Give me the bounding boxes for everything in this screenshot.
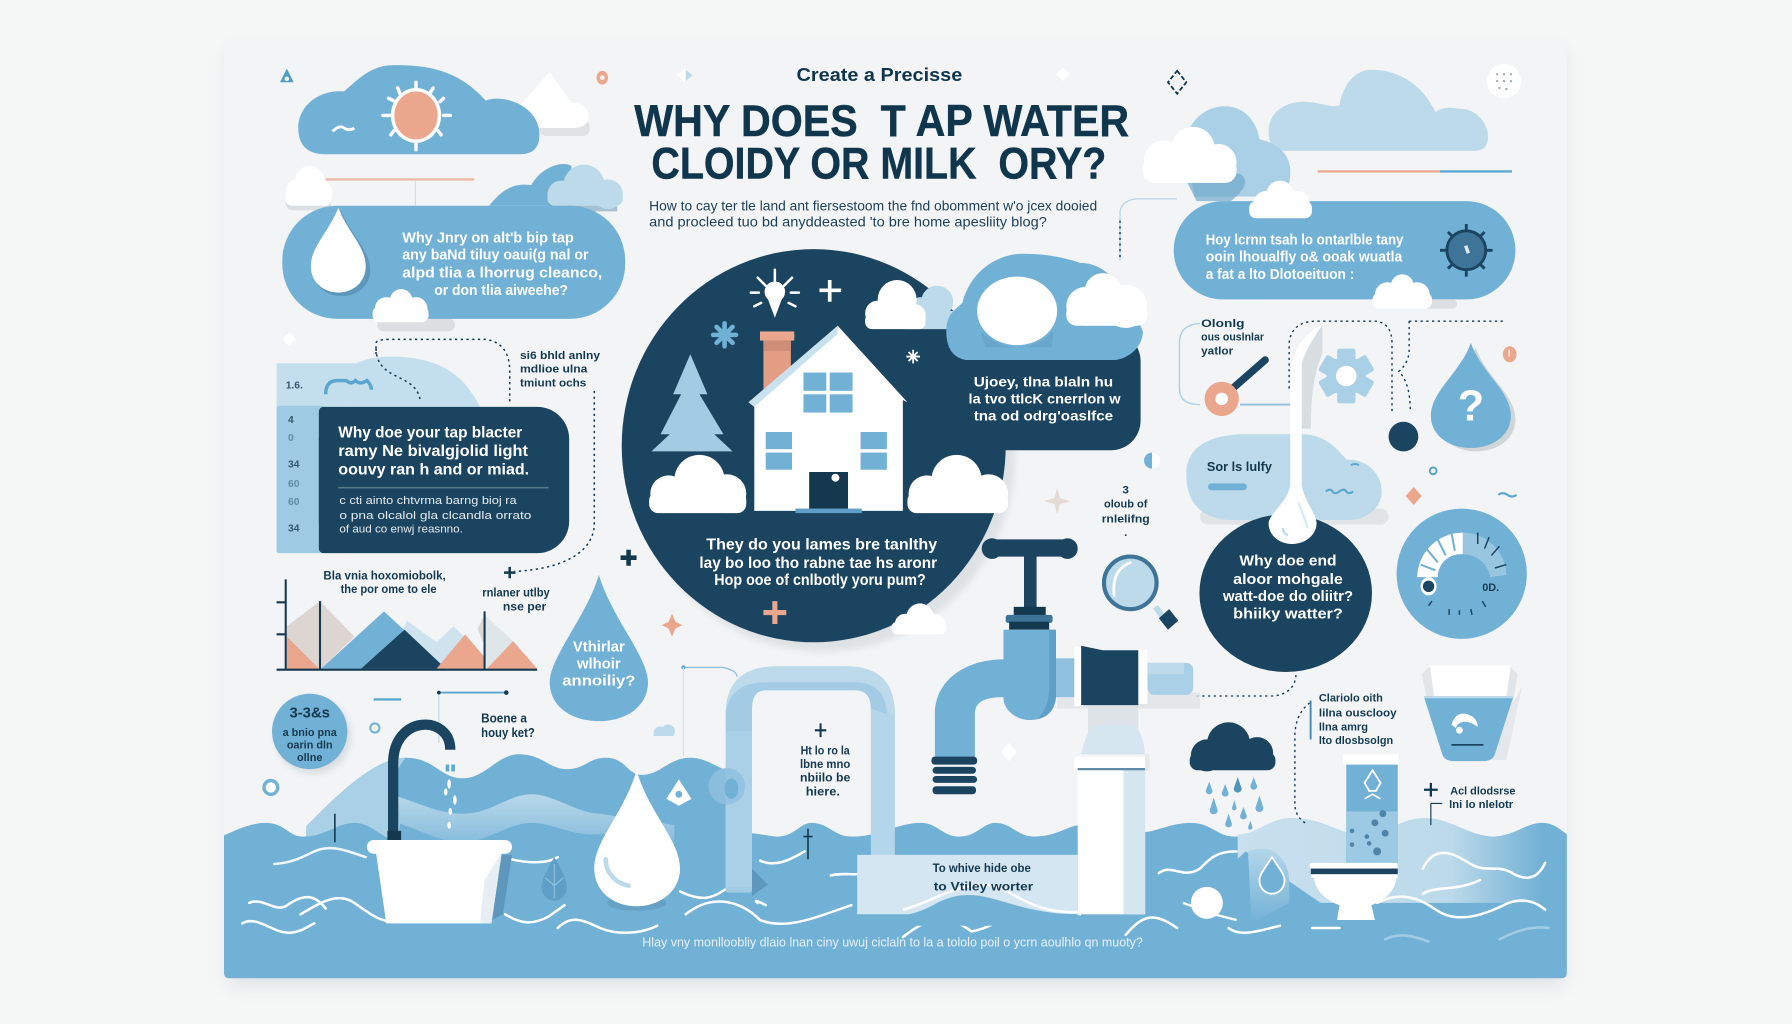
spout body	[935, 630, 1056, 760]
clouds in circle	[649, 455, 1008, 513]
icon: water drop	[311, 208, 370, 296]
icon: magnifier	[1104, 557, 1178, 630]
connector from cloud	[1120, 199, 1177, 261]
panel text: oouvy ran h and or miad.	[338, 461, 529, 478]
circle text: lay bo loo tho rabne tae hs aronr	[699, 555, 937, 572]
left dark text panel	[277, 357, 569, 553]
card background	[224, 41, 1567, 978]
right question bubble: Hoy lcrnn tsah lo ontarlble tany	[1206, 233, 1404, 249]
stat circle: oarin dln	[287, 740, 333, 752]
chart caption: the por ome to ele	[341, 582, 437, 596]
cloud callout: Ujoey, tlna blaln hu	[974, 374, 1113, 390]
icon: plus	[819, 280, 841, 302]
top right clouds	[1143, 70, 1512, 201]
footer question text: Hlay vny monlloobliy dlaio lnan ciny uwuj ciclaln to la a tololo poil o ycrn aoulhlo qn muoty?	[642, 935, 1143, 949]
title: WHY DOES T AP WATER	[634, 97, 1129, 146]
dark question circle: aloor mohgale	[1233, 572, 1343, 588]
toilet	[1310, 754, 1399, 920]
blue drop with question	[550, 575, 648, 721]
circle text: Hop ooe of cnlbotly yoru pum?	[714, 572, 926, 589]
pedestal caption box: To whive hide obe	[933, 861, 1031, 875]
note: middle right small	[1102, 485, 1150, 539]
gauge circle	[1397, 509, 1527, 639]
connector and sink note	[437, 690, 535, 743]
central dark circle	[622, 249, 1015, 651]
sun cloud	[298, 65, 539, 154]
dark dot	[1389, 422, 1418, 451]
icon: puzzle asterisk	[713, 323, 736, 346]
panel text: ramy Ne bivalgjolid light	[338, 443, 529, 460]
arch note text: hiere.	[806, 784, 840, 798]
question text: any baNd tiluy oaui(g nal or	[402, 247, 589, 263]
stat circle: 3-3&s	[289, 706, 330, 722]
overline: Create a Precisse: Create a Precisse	[797, 64, 962, 85]
arch note text: lbne mno	[800, 757, 850, 771]
question text: or don tlia aiweehe?	[434, 283, 568, 299]
right question bubble: ooin lhoualfly o& ooak wuatla	[1206, 250, 1403, 266]
note: filter description: lilna ousclooy	[1319, 708, 1397, 720]
dark rain cloud	[1190, 722, 1275, 830]
note: filter description: Clariolo oith	[1319, 693, 1383, 705]
tiny decoration icons	[264, 64, 1521, 794]
question text: alpd tlia a lhorrug cleanco,	[402, 266, 602, 282]
dark question circle	[1199, 514, 1372, 672]
arch note text	[800, 723, 851, 798]
note: side note top: si6 bhld anlny	[520, 350, 601, 362]
icon: leaf drop	[542, 857, 567, 901]
chart caption	[323, 568, 446, 596]
right question bubble: a fat a lto Dlotoeituon :	[1206, 267, 1354, 283]
light cloud panel	[1186, 434, 1389, 525]
note: side note top: mdlioe ulna	[520, 364, 588, 376]
sidebar labels: 1.6.	[286, 381, 303, 392]
spout rings	[931, 757, 977, 794]
arch pipe with note	[681, 665, 895, 903]
panel text: c cti ainto chtvrma barng bioj ra	[339, 495, 517, 507]
question text	[402, 230, 602, 299]
pedestal caption box: to Vtiley worter	[934, 879, 1034, 893]
dripping tube	[1269, 325, 1322, 544]
panel text	[338, 425, 549, 536]
arch note text: nbiilo be	[800, 771, 851, 785]
main faucet	[931, 538, 1200, 914]
dark question circle: watt-doe do oliitr?	[1222, 589, 1353, 605]
valve note	[1179, 318, 1291, 416]
note: side note top	[520, 350, 601, 389]
icon: small asterisk	[906, 350, 920, 363]
panel text: o pna olcalol gla clcandla orrato	[339, 510, 531, 522]
chart side note	[482, 586, 550, 613]
stat circle: ollne	[297, 752, 322, 764]
valve block	[1074, 647, 1083, 706]
icon: water glass	[1422, 665, 1522, 761]
salmon dot	[1503, 346, 1517, 362]
light cloud panel: Sor ls lulfy	[1207, 460, 1272, 474]
chart side note: rnlaner utlby	[482, 586, 550, 600]
arch note text: Ht lo ro la	[801, 743, 850, 757]
house	[749, 326, 907, 513]
stat circle	[272, 694, 351, 774]
title: CLOIDY OR MILK ORY?	[651, 139, 1106, 188]
pipe fitting with drop	[1248, 848, 1289, 923]
wave scene background	[224, 754, 1567, 978]
sink with faucet	[335, 725, 512, 923]
sidebar labels: 4	[288, 415, 294, 426]
icon: valve ring and stick	[1205, 360, 1265, 416]
note: side note top: tmiunt ochs	[520, 377, 586, 389]
icon: plus marker	[504, 567, 515, 578]
blue drop with question: annoiliy?	[562, 674, 635, 690]
dotted connectors right	[1120, 217, 1506, 823]
circle text	[699, 537, 938, 589]
sidebar labels	[286, 381, 303, 534]
panel text: of aud co enwj reasnno.	[339, 524, 463, 536]
icon: gear	[1318, 349, 1375, 403]
valve note: Olonlg	[1201, 318, 1245, 330]
title	[634, 64, 1129, 188]
pedestal caption box	[857, 855, 1080, 926]
cloud callout	[946, 254, 1147, 450]
gauge circle: 0D.	[1482, 582, 1499, 594]
blue drop with question: Vthirlar	[573, 639, 625, 655]
note: middle right small: 3	[1123, 485, 1129, 497]
chart caption: Bla vnia hoxomiobolk,	[323, 568, 446, 582]
note: side of toilet: lni lo nlelotr	[1449, 799, 1514, 811]
note: middle right small: rnlelifng	[1102, 513, 1150, 525]
big white drop	[594, 770, 680, 911]
cloud callout: tna od odrg'oaslfce	[974, 409, 1113, 425]
subtitle	[649, 198, 1097, 230]
note: side of toilet	[1424, 783, 1515, 825]
small diamond drop icon	[666, 779, 691, 806]
question text: Why Jnry on alt'b bip tap	[402, 230, 574, 246]
note: filter description: llna amrg	[1319, 721, 1368, 733]
circle text: They do you lames bre tanlthy	[706, 537, 938, 554]
subtitle: How to cay ter tle land ant fiersestoom the fnd obomment w'o jcex dooied	[649, 198, 1097, 214]
small white cloud on circle edge	[891, 603, 946, 634]
chart side note: nse per	[503, 599, 547, 613]
sidebar labels: 0	[288, 433, 294, 444]
right stub pipe	[1147, 663, 1193, 695]
blue drop with question: wlhoir	[576, 657, 621, 673]
icon: drop with question mark	[1431, 343, 1515, 451]
small white cloud	[373, 289, 429, 322]
connector and sink note: houy ket?	[481, 726, 535, 740]
dotted connectors left	[376, 339, 594, 571]
note: side of toilet: Acl dlodsrse	[1450, 785, 1515, 797]
icon: salmon plus	[763, 601, 786, 624]
sidebar labels: 34	[288, 459, 300, 470]
note: filter description: lto dlosbsolgn	[1319, 735, 1393, 747]
white peak cloud	[520, 72, 590, 136]
note: middle right small: oloub of	[1104, 498, 1148, 510]
note: middle right small: .	[1124, 527, 1127, 539]
white water squiggles	[242, 848, 1549, 942]
subtitle: and procleed tuo bd anyddeasted 'to bre home apesliity blog?	[649, 214, 1047, 230]
connector and sink note: Boene a	[481, 711, 528, 725]
sidebar labels: 34	[288, 523, 300, 534]
dark question circle: bhiiky watter?	[1233, 606, 1343, 622]
left question bubble with drop	[282, 164, 625, 331]
stat circle: a bnio pna	[283, 727, 338, 739]
sidebar labels: 60	[288, 479, 300, 490]
filter column	[1074, 699, 1150, 914]
handle	[982, 538, 1078, 630]
small clouds and line above bubble	[286, 166, 474, 210]
icon: virus	[1440, 224, 1493, 277]
icon: drop with question mark: ?	[1458, 383, 1484, 431]
valve note: yatlor	[1201, 345, 1234, 357]
right question bubble	[1174, 181, 1515, 309]
icon: light bulb	[751, 270, 799, 318]
white float ball	[1183, 887, 1237, 920]
valve note: ous ouslnlar	[1201, 332, 1265, 344]
panel text: Why doe your tap blacter	[338, 425, 522, 442]
icon: sun	[383, 82, 450, 150]
dark question circle: Why doe end	[1239, 554, 1337, 570]
area chart	[277, 579, 537, 670]
note: filter description	[1310, 693, 1397, 747]
cloud callout: la tvo ttlcK cnerrlon w	[969, 391, 1121, 407]
sidebar labels: 60	[288, 497, 300, 508]
icon: pine tree	[651, 354, 733, 451]
